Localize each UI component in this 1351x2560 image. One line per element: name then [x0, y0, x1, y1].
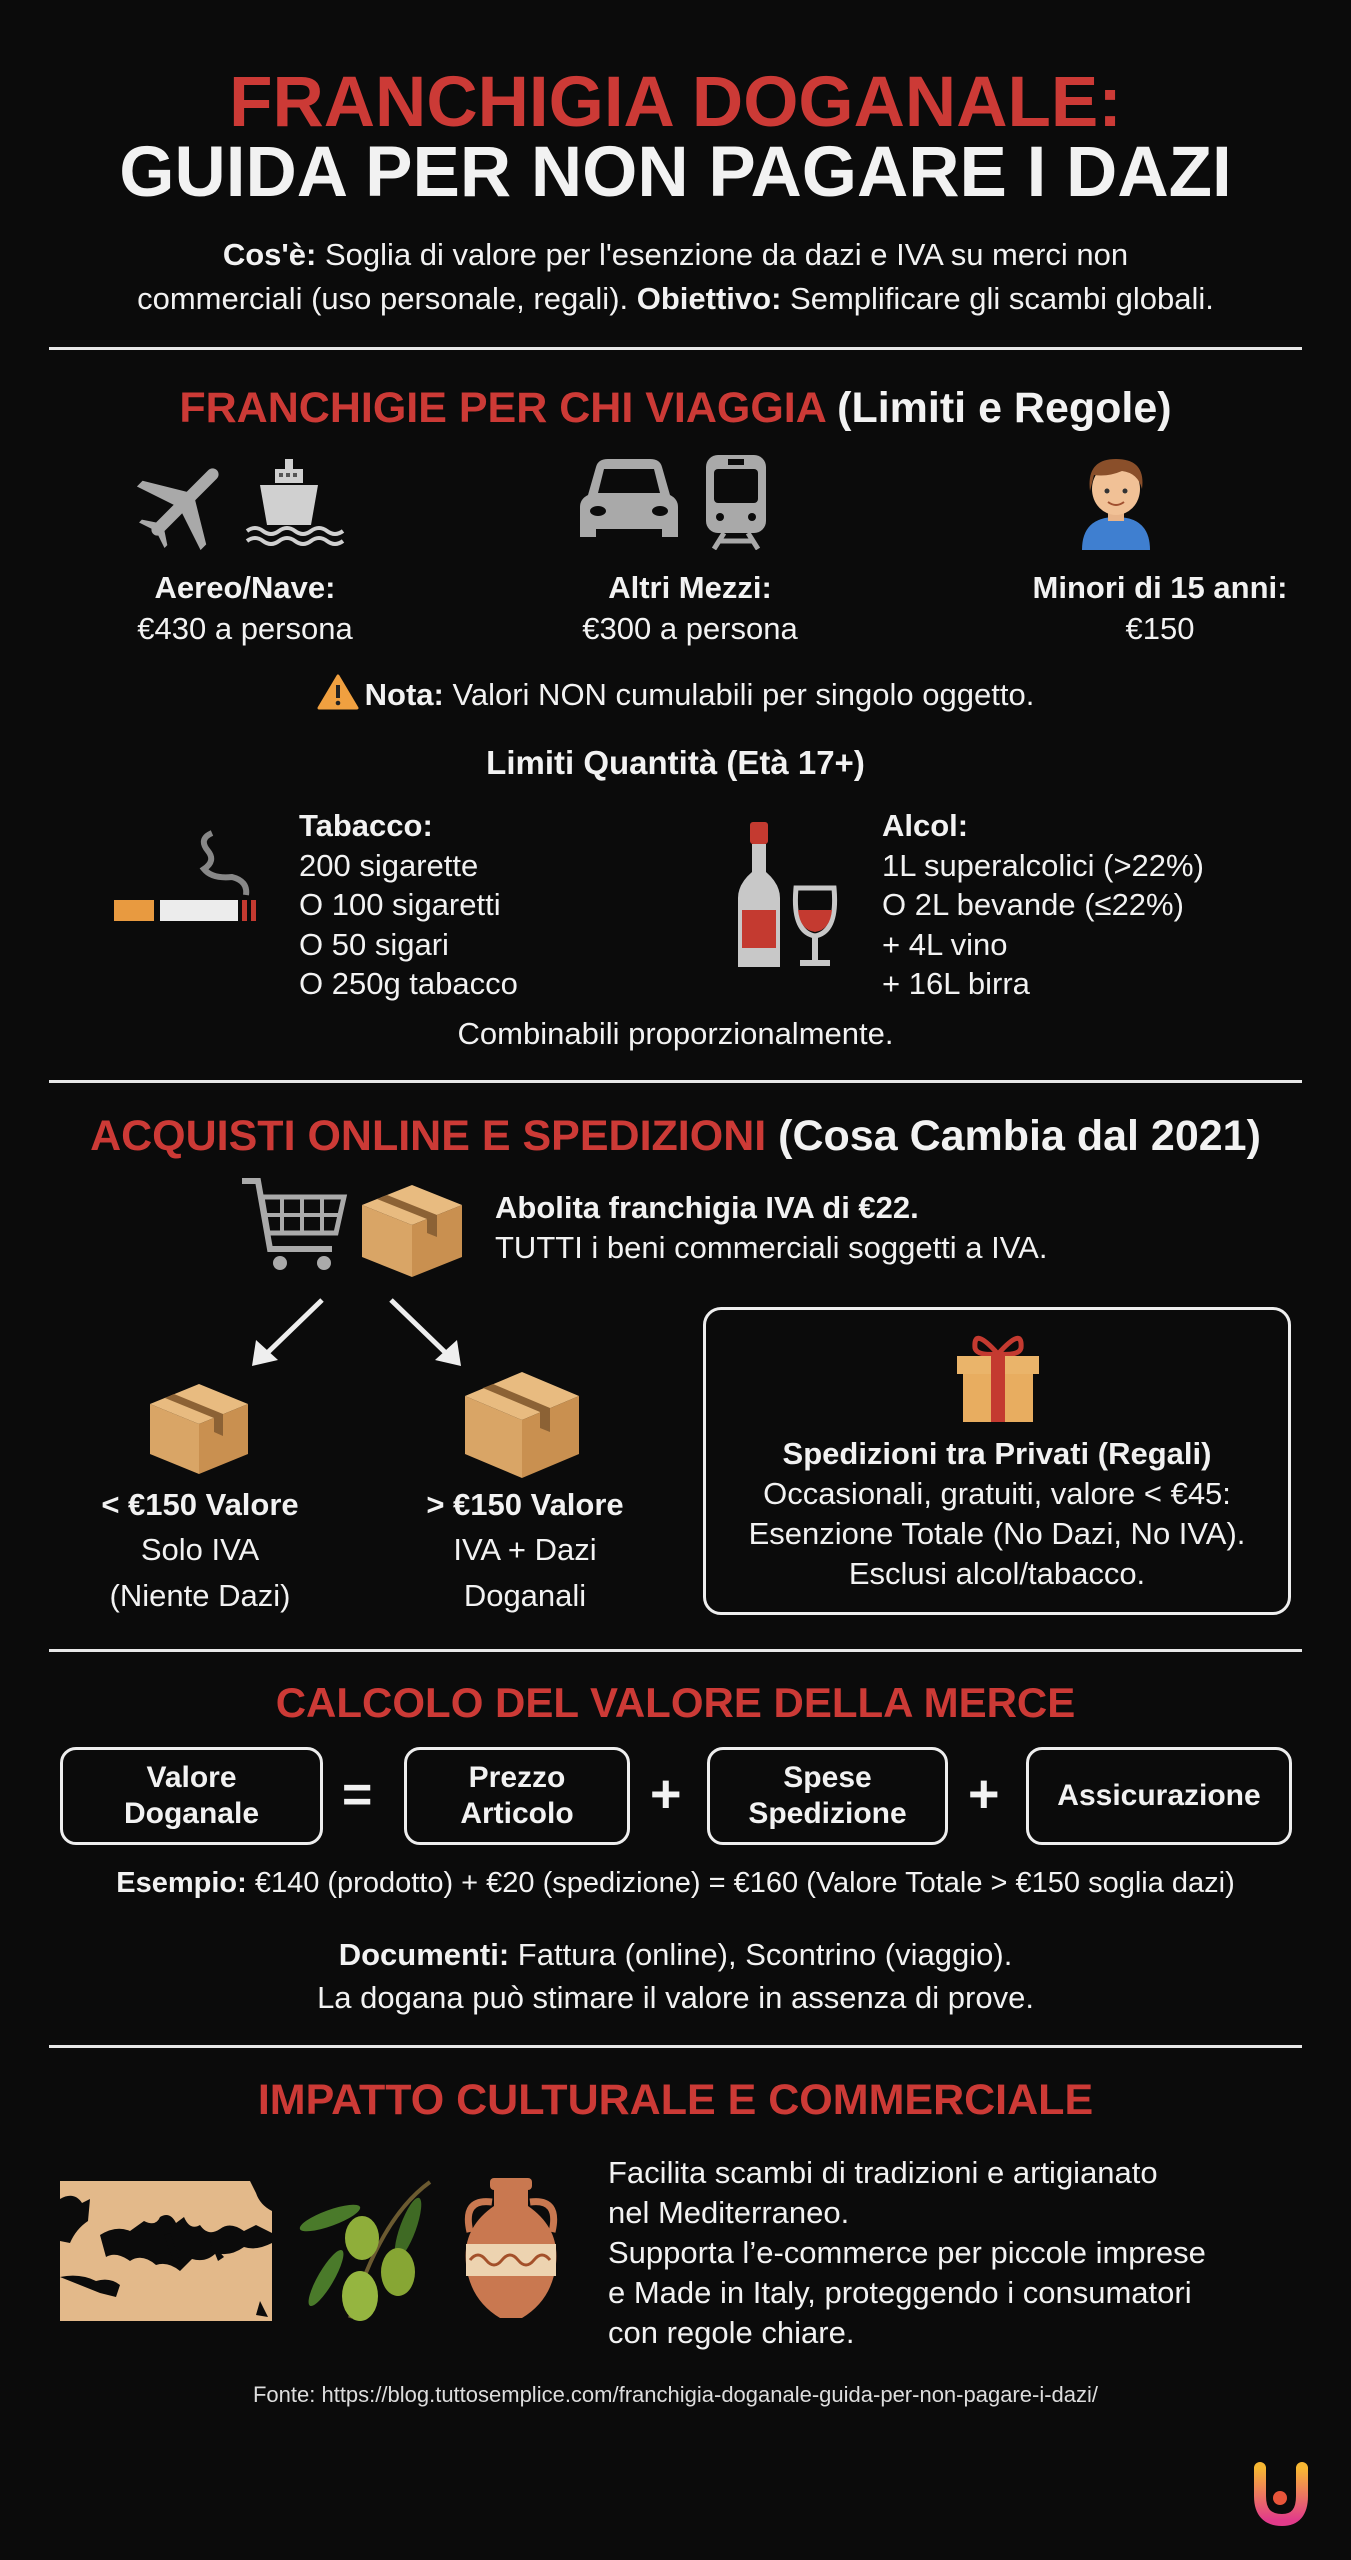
box: prezzo articolo: Articolo — [460, 1797, 574, 1830]
icon group: car and train — [580, 455, 766, 550]
traveller limit: minori: Minori di 15 anni: — [1033, 570, 1287, 605]
text: alcol limits: 1L superalcolici (>22%) — [882, 848, 1204, 882]
documents — [317, 1937, 1034, 2015]
icon: cigarette — [114, 830, 256, 921]
text: alcol limits: + 4L vino — [882, 926, 1008, 962]
traveller limit: minori — [1033, 570, 1287, 646]
subheading: limiti quantità: Limiti Quantità (Età 17+) — [486, 744, 865, 781]
box: spese spedizione: Spese — [783, 1761, 872, 1794]
panel: spedizioni tra privati — [703, 1307, 1291, 1615]
text: tabacco limits — [299, 808, 518, 1001]
title: GUIDA PER NON PAGARE I DAZI — [119, 133, 1232, 212]
text: impatto: e Made in Italy, proteggendo i consumatori — [608, 2275, 1192, 2310]
box: over 150 — [465, 1372, 579, 1478]
icon: mediterranean map — [60, 2181, 272, 2321]
icon: olive branch — [300, 2180, 432, 2321]
arrow: left — [252, 1298, 324, 1366]
box: assicurazione — [1026, 1747, 1292, 1845]
intro text: commerciali (uso personale, regali). Obiettivo: Semplificare gli scambi globali. — [137, 281, 1214, 316]
operator: plus: + — [650, 1764, 682, 1824]
text: tabacco limits: O 100 sigaretti — [299, 887, 501, 922]
text: alcol limits: + 16L birra — [882, 966, 1030, 1001]
box: assicurazione: Assicurazione — [1057, 1779, 1261, 1812]
box: spese spedizione — [707, 1747, 948, 1845]
box: valore doganale: Valore — [146, 1761, 237, 1794]
heading: calcolo: CALCOLO DEL VALORE DELLA MERCE — [276, 1679, 1075, 1726]
documents: Documenti: Fattura (online), Scontrino (viaggio). — [339, 1937, 1012, 1972]
text: alcol limits: Alcol: — [882, 808, 968, 843]
arrow: right — [389, 1298, 461, 1366]
box: valore doganale: Doganale — [124, 1797, 259, 1830]
documents: La dogana può stimare il valore in assenza di prove. — [317, 1980, 1034, 2015]
box: valore doganale — [60, 1747, 323, 1845]
note with warning icon: Nota: Valori NON cumulabili per singolo oggetto. — [365, 677, 1034, 712]
title: FRANCHIGIA DOGANALE: — [229, 63, 1122, 142]
label: over 150: > €150 Valore — [426, 1487, 624, 1522]
logo — [1254, 2462, 1308, 2526]
label: under 150: < €150 Valore — [101, 1487, 299, 1522]
text: impatto: con regole chiare. — [608, 2315, 854, 2350]
text: regali: Esclusi alcol/tabacco. — [849, 1556, 1145, 1591]
text: tabacco limits: O 250g tabacco — [299, 966, 518, 1001]
traveller limit: aereo/nave — [137, 570, 353, 646]
intro text: Cos'è: Soglia di valore per l'esenzione da dazi e IVA su merci non — [223, 237, 1128, 272]
example: Esempio: €140 (prodotto) + €20 (spedizione) = €160 (Valore Totale > €150 soglia dazi) — [116, 1867, 1235, 1899]
icon: cart and box — [242, 1178, 462, 1277]
text: impatto: Supporta l’e-commerce per piccole imprese — [608, 2235, 1206, 2270]
label: over 150: IVA + Dazi — [453, 1532, 597, 1567]
label: over 150: Doganali — [464, 1578, 586, 1613]
text: tabacco limits: Tabacco: — [299, 808, 433, 843]
text: impatto — [608, 2155, 1206, 2350]
icon: child — [1082, 459, 1150, 550]
text: abolita franchigia IVA: TUTTI i beni commerciali soggetti a IVA. — [495, 1230, 1047, 1265]
text: abolita franchigia IVA — [495, 1190, 1047, 1265]
icon: wine bottle and glass — [738, 822, 838, 967]
text: alcol limits: O 2L bevande (≤22%) — [882, 887, 1184, 922]
operator: plus: + — [968, 1764, 1000, 1824]
icon: amphora — [464, 2178, 558, 2318]
text: impatto: Facilita scambi di tradizioni e artigianato — [608, 2155, 1158, 2190]
text: regali: Spedizioni tra Privati (Regali) — [783, 1436, 1211, 1471]
box: under 150 — [150, 1384, 248, 1474]
traveller limit: aereo/nave: Aereo/Nave: — [155, 570, 335, 605]
note: combinabili: Combinabili proporzionalmente. — [458, 1016, 893, 1051]
text: abolita franchigia IVA: Abolita franchigia IVA di €22. — [495, 1190, 919, 1225]
label: under 150: Solo IVA — [141, 1532, 259, 1567]
text: alcol limits — [882, 808, 1204, 1001]
traveller limit: altri mezzi — [582, 570, 798, 646]
source: Fonte: https://blog.tuttosemplice.com/franchigia-doganale-guida-per-non-pagare-i-dazi/ — [253, 2382, 1098, 2407]
label: under 150: (Niente Dazi) — [110, 1578, 290, 1613]
traveller limit: altri mezzi: Altri Mezzi: — [608, 570, 772, 605]
traveller limit: altri mezzi: €300 a persona — [582, 611, 798, 646]
text: regali — [749, 1436, 1245, 1591]
formula — [60, 1747, 1292, 1845]
heading: acquisti online: ACQUISTI ONLINE E SPEDIZIONI (Cosa Cambia dal 2021) — [90, 1112, 1261, 1160]
icon: gift — [957, 1336, 1039, 1422]
operator: equals: = — [342, 1766, 372, 1824]
traveller limit: aereo/nave: €430 a persona — [137, 611, 353, 646]
text: regali: Esenzione Totale (No Dazi, No IVA). — [749, 1516, 1245, 1551]
traveller limit: minori: €150 — [1126, 611, 1194, 646]
heading: impatto: IMPATTO CULTURALE E COMMERCIALE — [258, 2076, 1093, 2124]
text: tabacco limits: 200 sigarette — [299, 848, 478, 882]
icon group: plane and ship — [137, 459, 344, 550]
box: prezzo articolo — [404, 1747, 630, 1845]
box: prezzo articolo: Prezzo — [469, 1761, 565, 1794]
text: tabacco limits: O 50 sigari — [299, 926, 449, 962]
intro text — [137, 237, 1214, 316]
label: under 150 — [101, 1487, 299, 1613]
title — [119, 63, 1232, 212]
label: over 150 — [426, 1487, 624, 1613]
heading: franchigie per chi viaggia: FRANCHIGIE PER CHI VIAGGIA (Limiti e Regole) — [179, 384, 1172, 432]
text: impatto: nel Mediterraneo. — [608, 2195, 849, 2230]
box: spese spedizione: Spedizione — [748, 1797, 907, 1830]
text: regali: Occasionali, gratuiti, valore < €45: — [763, 1476, 1231, 1511]
